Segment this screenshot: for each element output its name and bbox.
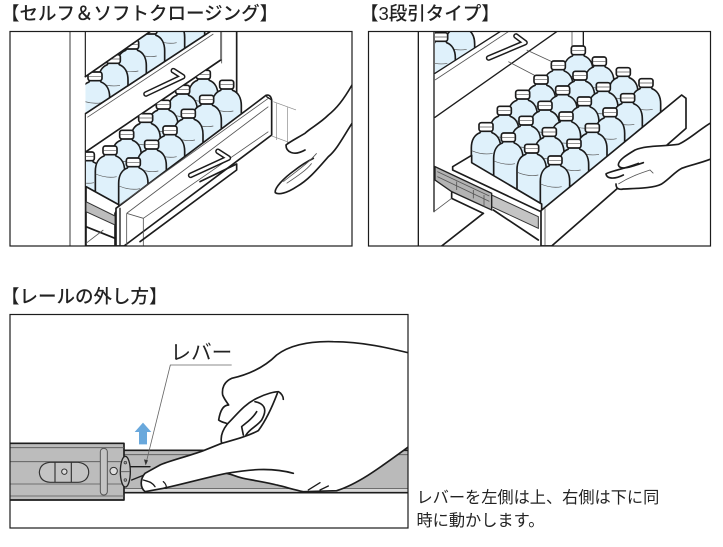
panel: three-stage drawer: [418, 19, 712, 246]
drawer rim and rail: [434, 155, 542, 246]
drawer side panel: [541, 95, 686, 246]
cabinet frame lines: [70, 32, 237, 246]
icon: hand on drawer: [606, 123, 712, 190]
drawer bottles: [471, 46, 661, 224]
icon: hand: [141, 342, 413, 492]
ghost open drawer lines: [272, 102, 296, 144]
label: lever: レバー: [170, 341, 232, 364]
instruction text: レバーを左側は上、右側は下に同: [416, 489, 659, 507]
lower drawer bottles: [86, 70, 242, 204]
outer rail with lever: [10, 443, 130, 500]
icon: blue up arrow: [135, 423, 151, 444]
upper drawer bottles: [435, 32, 476, 72]
upper drawer front: [434, 32, 558, 118]
icon: hand on drawer: [275, 83, 353, 194]
upper drawer front: [85, 32, 221, 152]
panel: self and soft closing drawer: [69, 32, 352, 246]
drawer rail: [86, 187, 119, 246]
upper drawer bottles: [85, 32, 206, 112]
leader line to lever: [144, 365, 232, 465]
title: self and soft closing: 【セルフ＆ソフトクロージング】: [1, 3, 278, 24]
title: three-stage drawer: 【3段引タイプ】: [360, 3, 500, 24]
drawer front panel: [116, 95, 272, 246]
instruction text: 時に動かします。: [416, 512, 544, 530]
title: how to remove the rail: 【レールの外し方】: [1, 286, 168, 307]
cabinet frame lines: [418, 32, 583, 246]
right inner rail: [124, 450, 411, 493]
panel: how to remove the rail: [10, 341, 413, 500]
